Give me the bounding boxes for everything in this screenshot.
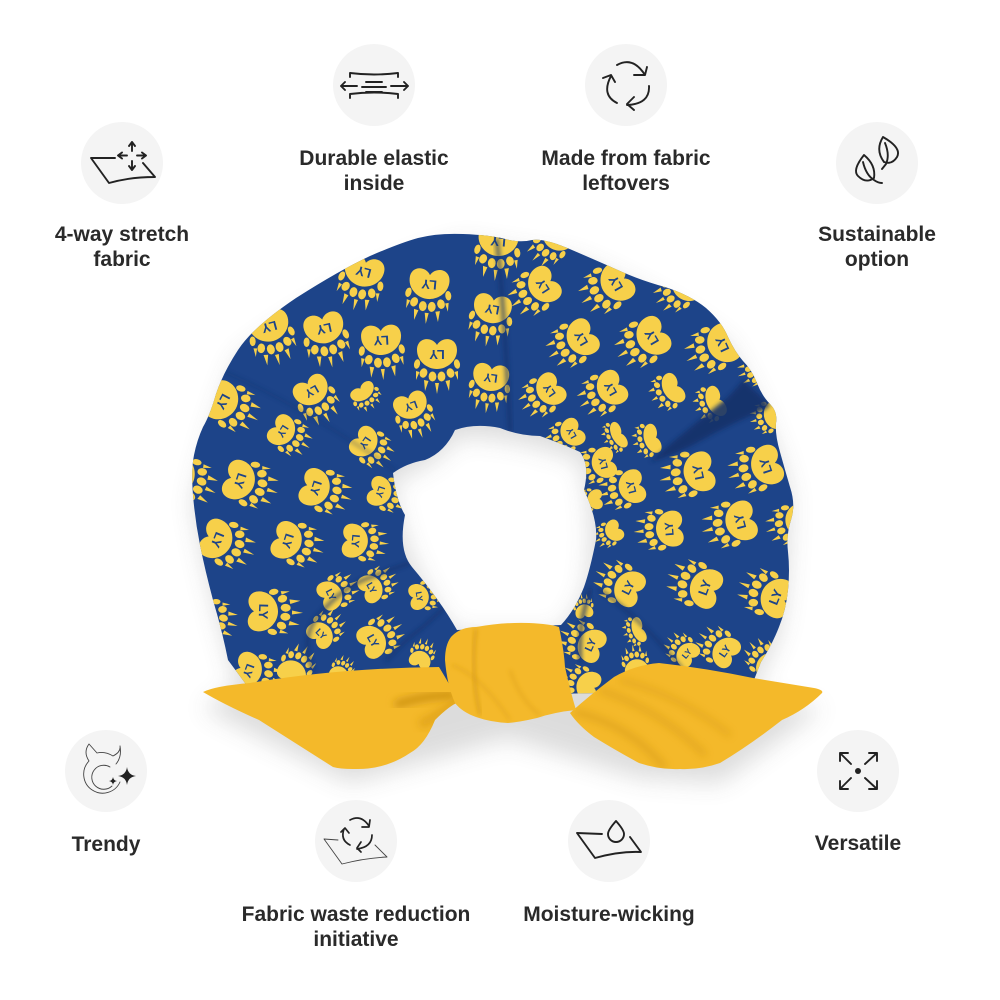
icon: four diagonal arrows	[817, 730, 899, 812]
paw pattern: LY	[712, 334, 732, 354]
paw pattern: LY	[766, 587, 785, 607]
icon: recycle arrows over sheet	[315, 800, 397, 882]
paw pattern: LY	[483, 301, 501, 317]
paw pattern: LY	[414, 591, 425, 603]
label: Fabric waste reduction	[242, 903, 470, 926]
paw pattern: LY	[421, 276, 438, 293]
paw pattern: LY	[213, 391, 233, 412]
paw pattern: LY	[256, 604, 271, 620]
paw pattern: LY	[356, 434, 372, 450]
icon: water drop over sheet	[568, 800, 650, 882]
paw pattern: LY	[533, 275, 553, 296]
left bow tail	[203, 667, 456, 769]
icon: two leaves	[836, 122, 918, 204]
right bow tail	[570, 663, 822, 770]
label: inside	[344, 172, 404, 195]
feature: sustainable option	[818, 122, 936, 271]
paw pattern: LY	[323, 587, 338, 603]
paw pattern: LY	[302, 382, 321, 400]
paw pattern: LY	[429, 347, 445, 362]
paw pattern: LY	[731, 512, 749, 531]
paw pattern: LY	[718, 644, 734, 660]
feature: made from fabric leftovers	[541, 44, 711, 195]
icon: elastic band stretched	[333, 44, 415, 126]
paw pattern: LY	[490, 233, 507, 250]
paw pattern: LY	[364, 632, 381, 650]
label: Trendy	[72, 833, 141, 856]
fabric folds	[225, 240, 690, 680]
label: option	[845, 248, 909, 271]
paw pattern: LY	[240, 662, 257, 680]
icon: stretch sheet with four arrows	[81, 122, 163, 204]
paw pattern	[192, 234, 794, 694]
dark fabric fold on right	[650, 380, 770, 462]
feature: 4-way stretch fabric	[55, 122, 189, 271]
paw pattern: LY	[306, 479, 324, 498]
paw pattern: LY	[663, 521, 677, 536]
feature: trendy	[65, 730, 147, 856]
bow knot	[445, 623, 576, 723]
feature: moisture-wicking	[523, 800, 695, 926]
paw pattern: LY	[602, 379, 620, 398]
paw pattern: LY	[564, 425, 579, 440]
soft shadow under scrunchie	[193, 242, 822, 783]
paw pattern: LY	[571, 328, 591, 348]
paw pattern: LY	[348, 534, 361, 549]
label: Versatile	[815, 832, 901, 855]
paw pattern: LY	[756, 456, 775, 475]
paw pattern: LY	[689, 463, 707, 481]
fabric body with paw pattern	[192, 234, 794, 694]
paw pattern: LY	[231, 471, 250, 491]
paw pattern: LY	[274, 423, 290, 439]
feature: versatile	[815, 730, 901, 855]
label: leftovers	[582, 172, 670, 195]
label: Moisture-wicking	[523, 903, 695, 926]
label: Durable elastic	[299, 147, 449, 170]
paw pattern: LY	[605, 273, 626, 294]
paw pattern: LY	[354, 263, 373, 281]
paw pattern: LY	[278, 532, 296, 551]
label: Made from fabric	[541, 147, 711, 170]
paw pattern: LY	[641, 327, 662, 348]
paw pattern: LY	[373, 333, 389, 348]
paw pattern: LY	[541, 381, 559, 399]
paw pattern: LY	[372, 484, 387, 499]
label: Sustainable	[818, 223, 936, 246]
icon: cat-eared scrunchie with sparkles	[65, 730, 147, 812]
paw pattern: LY	[402, 398, 419, 414]
paw pattern: LY	[583, 636, 600, 654]
label: 4-way stretch	[55, 223, 189, 246]
icon: recycle arrows	[585, 44, 667, 126]
paw pattern: LY	[680, 646, 694, 661]
paw pattern: LY	[624, 478, 639, 495]
paw pattern: LY	[483, 370, 499, 385]
feature: durable elastic inside	[299, 44, 449, 195]
label: fabric	[93, 248, 151, 271]
paw pattern: LY	[315, 320, 333, 338]
paw pattern: LY	[313, 627, 329, 642]
feature: fabric waste reduction initiative	[242, 800, 470, 951]
product: scrunchie with bow	[156, 213, 830, 783]
paw pattern: LY	[619, 578, 638, 597]
label: initiative	[313, 928, 399, 951]
paw pattern: LY	[260, 318, 279, 336]
paw pattern: LY	[208, 530, 227, 550]
paw pattern: LY	[695, 578, 714, 597]
paw pattern: LY	[364, 581, 379, 596]
paw pattern: LY	[597, 456, 611, 470]
